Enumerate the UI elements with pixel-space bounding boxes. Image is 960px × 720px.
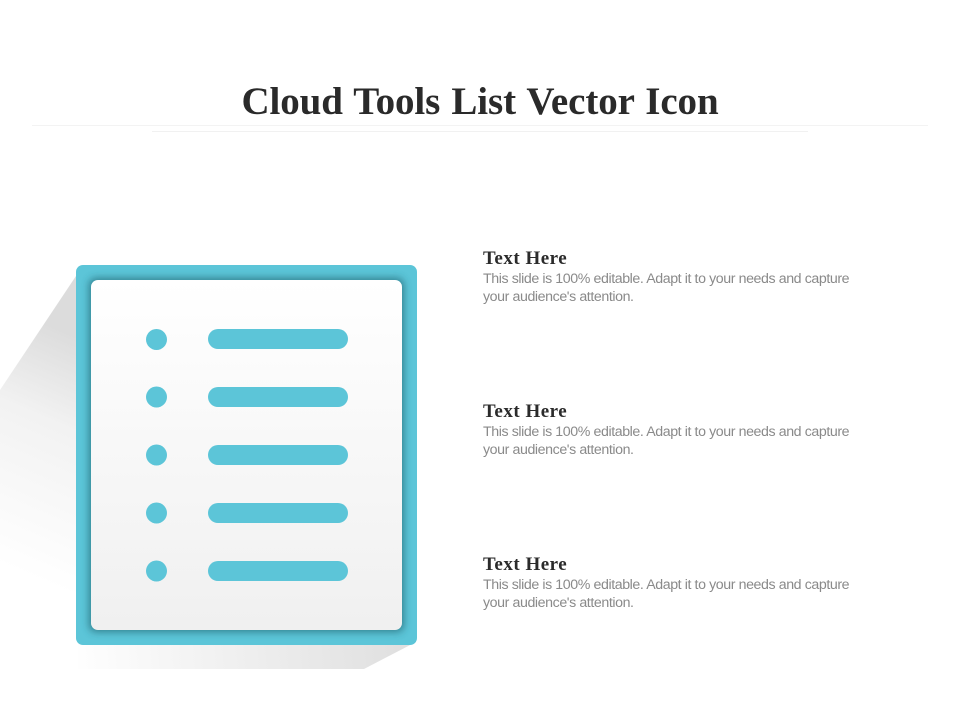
teal frame [76, 265, 417, 645]
description 1: your audience's attention. [483, 289, 634, 305]
title: Cloud Tools List Vector Icon [241, 80, 719, 123]
heading 1: Text Here [483, 248, 567, 269]
long shadow bottom [78, 640, 416, 669]
description 3: your audience's attention. [483, 595, 634, 611]
bullet row 2 [146, 386, 348, 408]
bullet row 3 [146, 444, 348, 466]
long shadow left [0, 270, 80, 669]
bullet row 4 [146, 502, 348, 524]
bullet row 5 [146, 560, 348, 582]
white list page [91, 280, 402, 630]
text block 2 [483, 401, 849, 458]
bullet row 1 [146, 329, 348, 350]
description 2 [483, 424, 849, 458]
description 1: This slide is 100% editable. Adapt it to your needs and capture [483, 271, 849, 287]
description 3 [483, 577, 849, 611]
text block 3 [483, 554, 849, 611]
description 1 [483, 271, 849, 305]
description 2: This slide is 100% editable. Adapt it to your needs and capture [483, 424, 849, 440]
description 2: your audience's attention. [483, 442, 634, 458]
icon: cloud tools list [0, 265, 417, 669]
text block 1 [483, 248, 849, 305]
heading 3: Text Here [483, 554, 567, 575]
description 3: This slide is 100% editable. Adapt it to your needs and capture [483, 577, 849, 593]
heading 2: Text Here [483, 401, 567, 422]
title underline [32, 125, 928, 132]
inner shadow [89, 278, 404, 632]
